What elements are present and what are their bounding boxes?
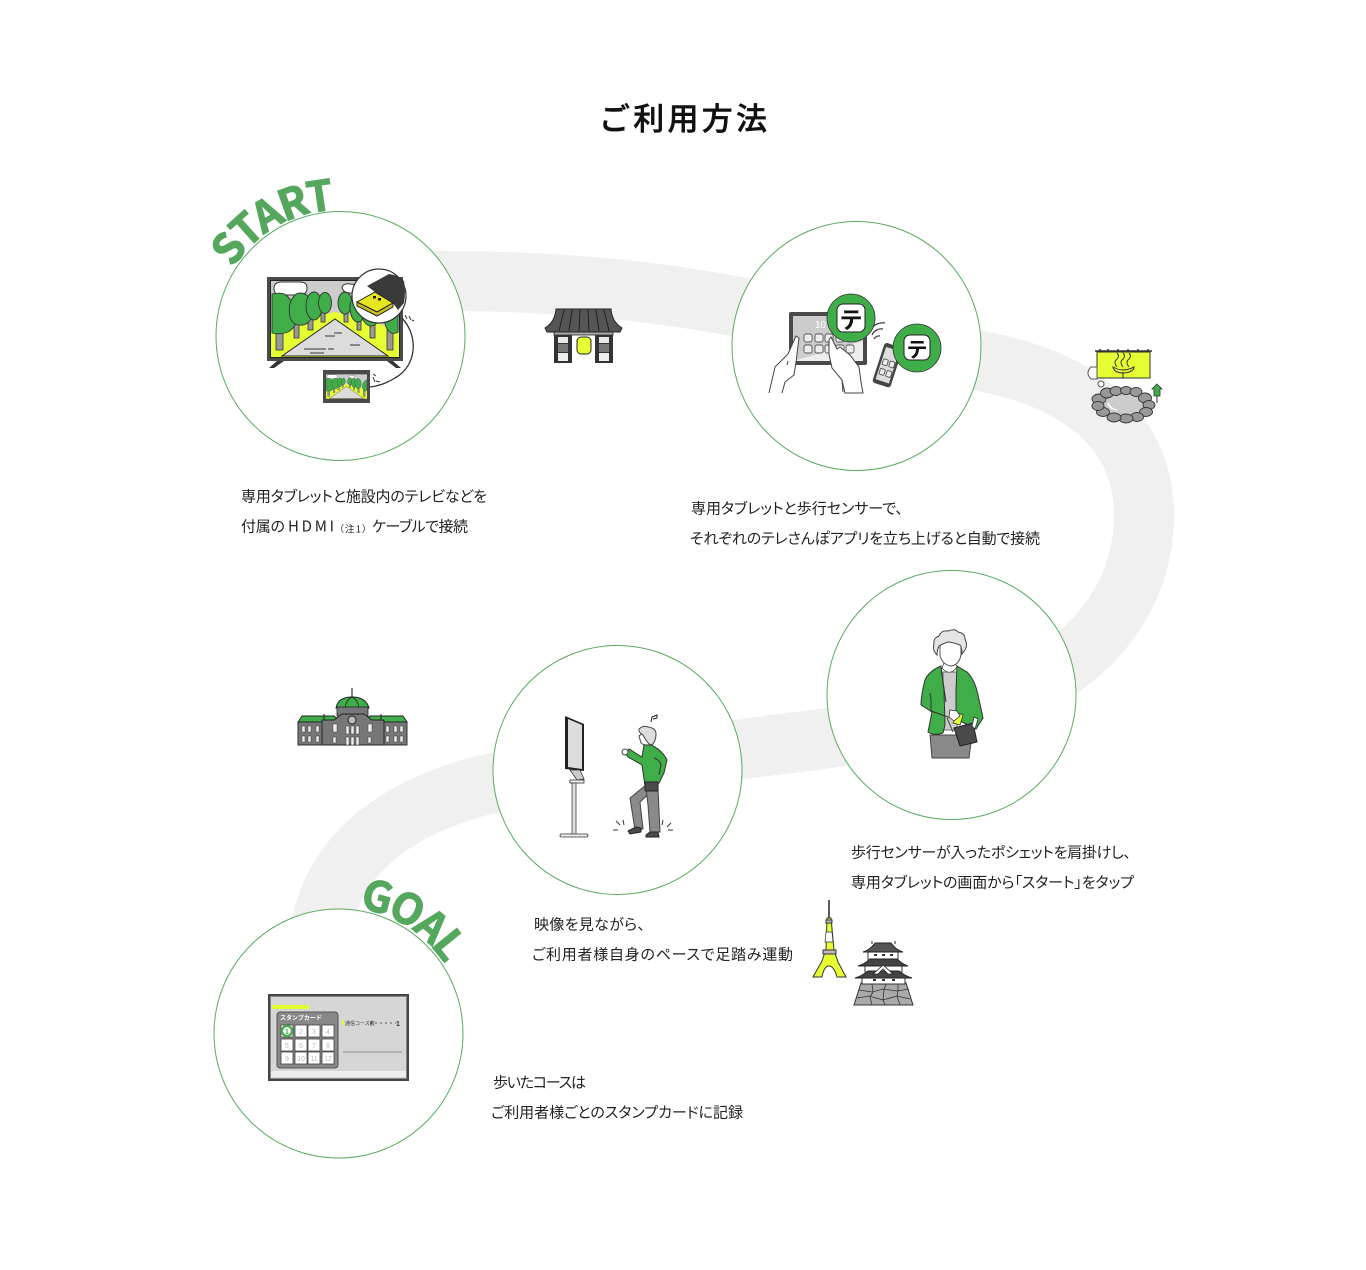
title: ご利用方法 bbox=[599, 94, 767, 139]
step 2 description: それぞれのテレさんぽアプリを立ち上げると自動で接続 bbox=[690, 528, 1040, 548]
step 3 description: 歩行センサーが入ったポシェットを肩掛けし、 bbox=[851, 842, 1131, 862]
step 1 description: （注1） bbox=[339, 522, 367, 536]
winding route band bbox=[320, 281, 1144, 930]
illustration: tablet and phone apps: 10 bbox=[815, 320, 827, 331]
illustration: stamp card screen: 12 bbox=[324, 1056, 332, 1063]
illustration: person with pochette bbox=[921, 630, 983, 758]
START label: START bbox=[212, 178, 330, 264]
step 1 description: 付属の bbox=[241, 516, 285, 536]
step 5 circle bbox=[214, 909, 463, 1158]
illustration: stamp card screen: 4 bbox=[326, 1029, 330, 1036]
step 3 description bbox=[851, 842, 1134, 892]
step 3 description: 専用タブレットの画面から「スタート」をタップ bbox=[851, 872, 1134, 892]
step 4 circle bbox=[493, 646, 742, 894]
step 4 description bbox=[532, 914, 793, 964]
illustration: TV connected to tablet by HDMI bbox=[267, 269, 414, 403]
illustration: stamp card screen: 通信コース数 bbox=[345, 1020, 375, 1027]
GOAL label: GOAL bbox=[364, 880, 462, 964]
step 1 description: ケーブルで接続 bbox=[372, 516, 468, 536]
illustration: stamp card screen: 8 bbox=[326, 1043, 330, 1050]
illustration: stamp card screen: 1 bbox=[396, 1021, 400, 1028]
illustration: stamp card screen: 11 bbox=[310, 1056, 318, 1063]
illustration: stamp card screen bbox=[268, 994, 409, 1081]
step 1 circle bbox=[216, 212, 465, 460]
step 5 description: ご利用者様ごとのスタンプカードに記録 bbox=[491, 1102, 743, 1122]
step 2 description bbox=[690, 498, 1040, 548]
step 1 description bbox=[241, 486, 487, 536]
landmark: castle bbox=[854, 941, 913, 1005]
illustration: tablet and phone apps bbox=[769, 294, 941, 393]
step 4 description: ご利用者様自身のペースで足踏み運動 bbox=[532, 944, 793, 964]
landmark: Tokyo Tower bbox=[813, 900, 846, 977]
illustration: stamp card screen: 9 bbox=[285, 1056, 289, 1063]
illustration: tablet and phone apps: テ bbox=[906, 334, 928, 364]
illustration: stamp card screen: スタンプカード bbox=[280, 1013, 322, 1022]
step 4 description: 映像を見ながら、 bbox=[534, 914, 645, 934]
illustration: tablet and phone apps: テ bbox=[840, 301, 862, 335]
illustration: stamp card screen: 1 bbox=[285, 1029, 289, 1036]
illustration: stamp card screen: 3 bbox=[312, 1029, 316, 1036]
step 1 description: 専用タブレットと施設内のテレビなどを bbox=[241, 486, 487, 506]
illustration: stamp card screen: 10 bbox=[297, 1056, 305, 1063]
illustration: stamp card screen: 2 bbox=[299, 1029, 303, 1036]
landmark: Tokyo Station bbox=[298, 688, 407, 745]
landmark: temple gate bbox=[545, 309, 622, 363]
illustration: stamp card screen: 6 bbox=[299, 1043, 303, 1050]
step 3 circle bbox=[827, 570, 1076, 820]
step 2 description: 専用タブレットと歩行センサーで、 bbox=[691, 498, 903, 518]
illustration: stamp card screen: 5 bbox=[285, 1043, 289, 1050]
step 5 description: 歩いたコースは bbox=[493, 1072, 586, 1092]
step 5 description bbox=[491, 1072, 743, 1122]
step 2 circle bbox=[732, 222, 981, 470]
landmark: hot spring bbox=[1088, 349, 1162, 423]
step 1 description: HDMI bbox=[288, 516, 334, 536]
illustration: monitor on stand and stepping person bbox=[560, 715, 673, 837]
illustration: stamp card screen: 7 bbox=[312, 1043, 316, 1050]
